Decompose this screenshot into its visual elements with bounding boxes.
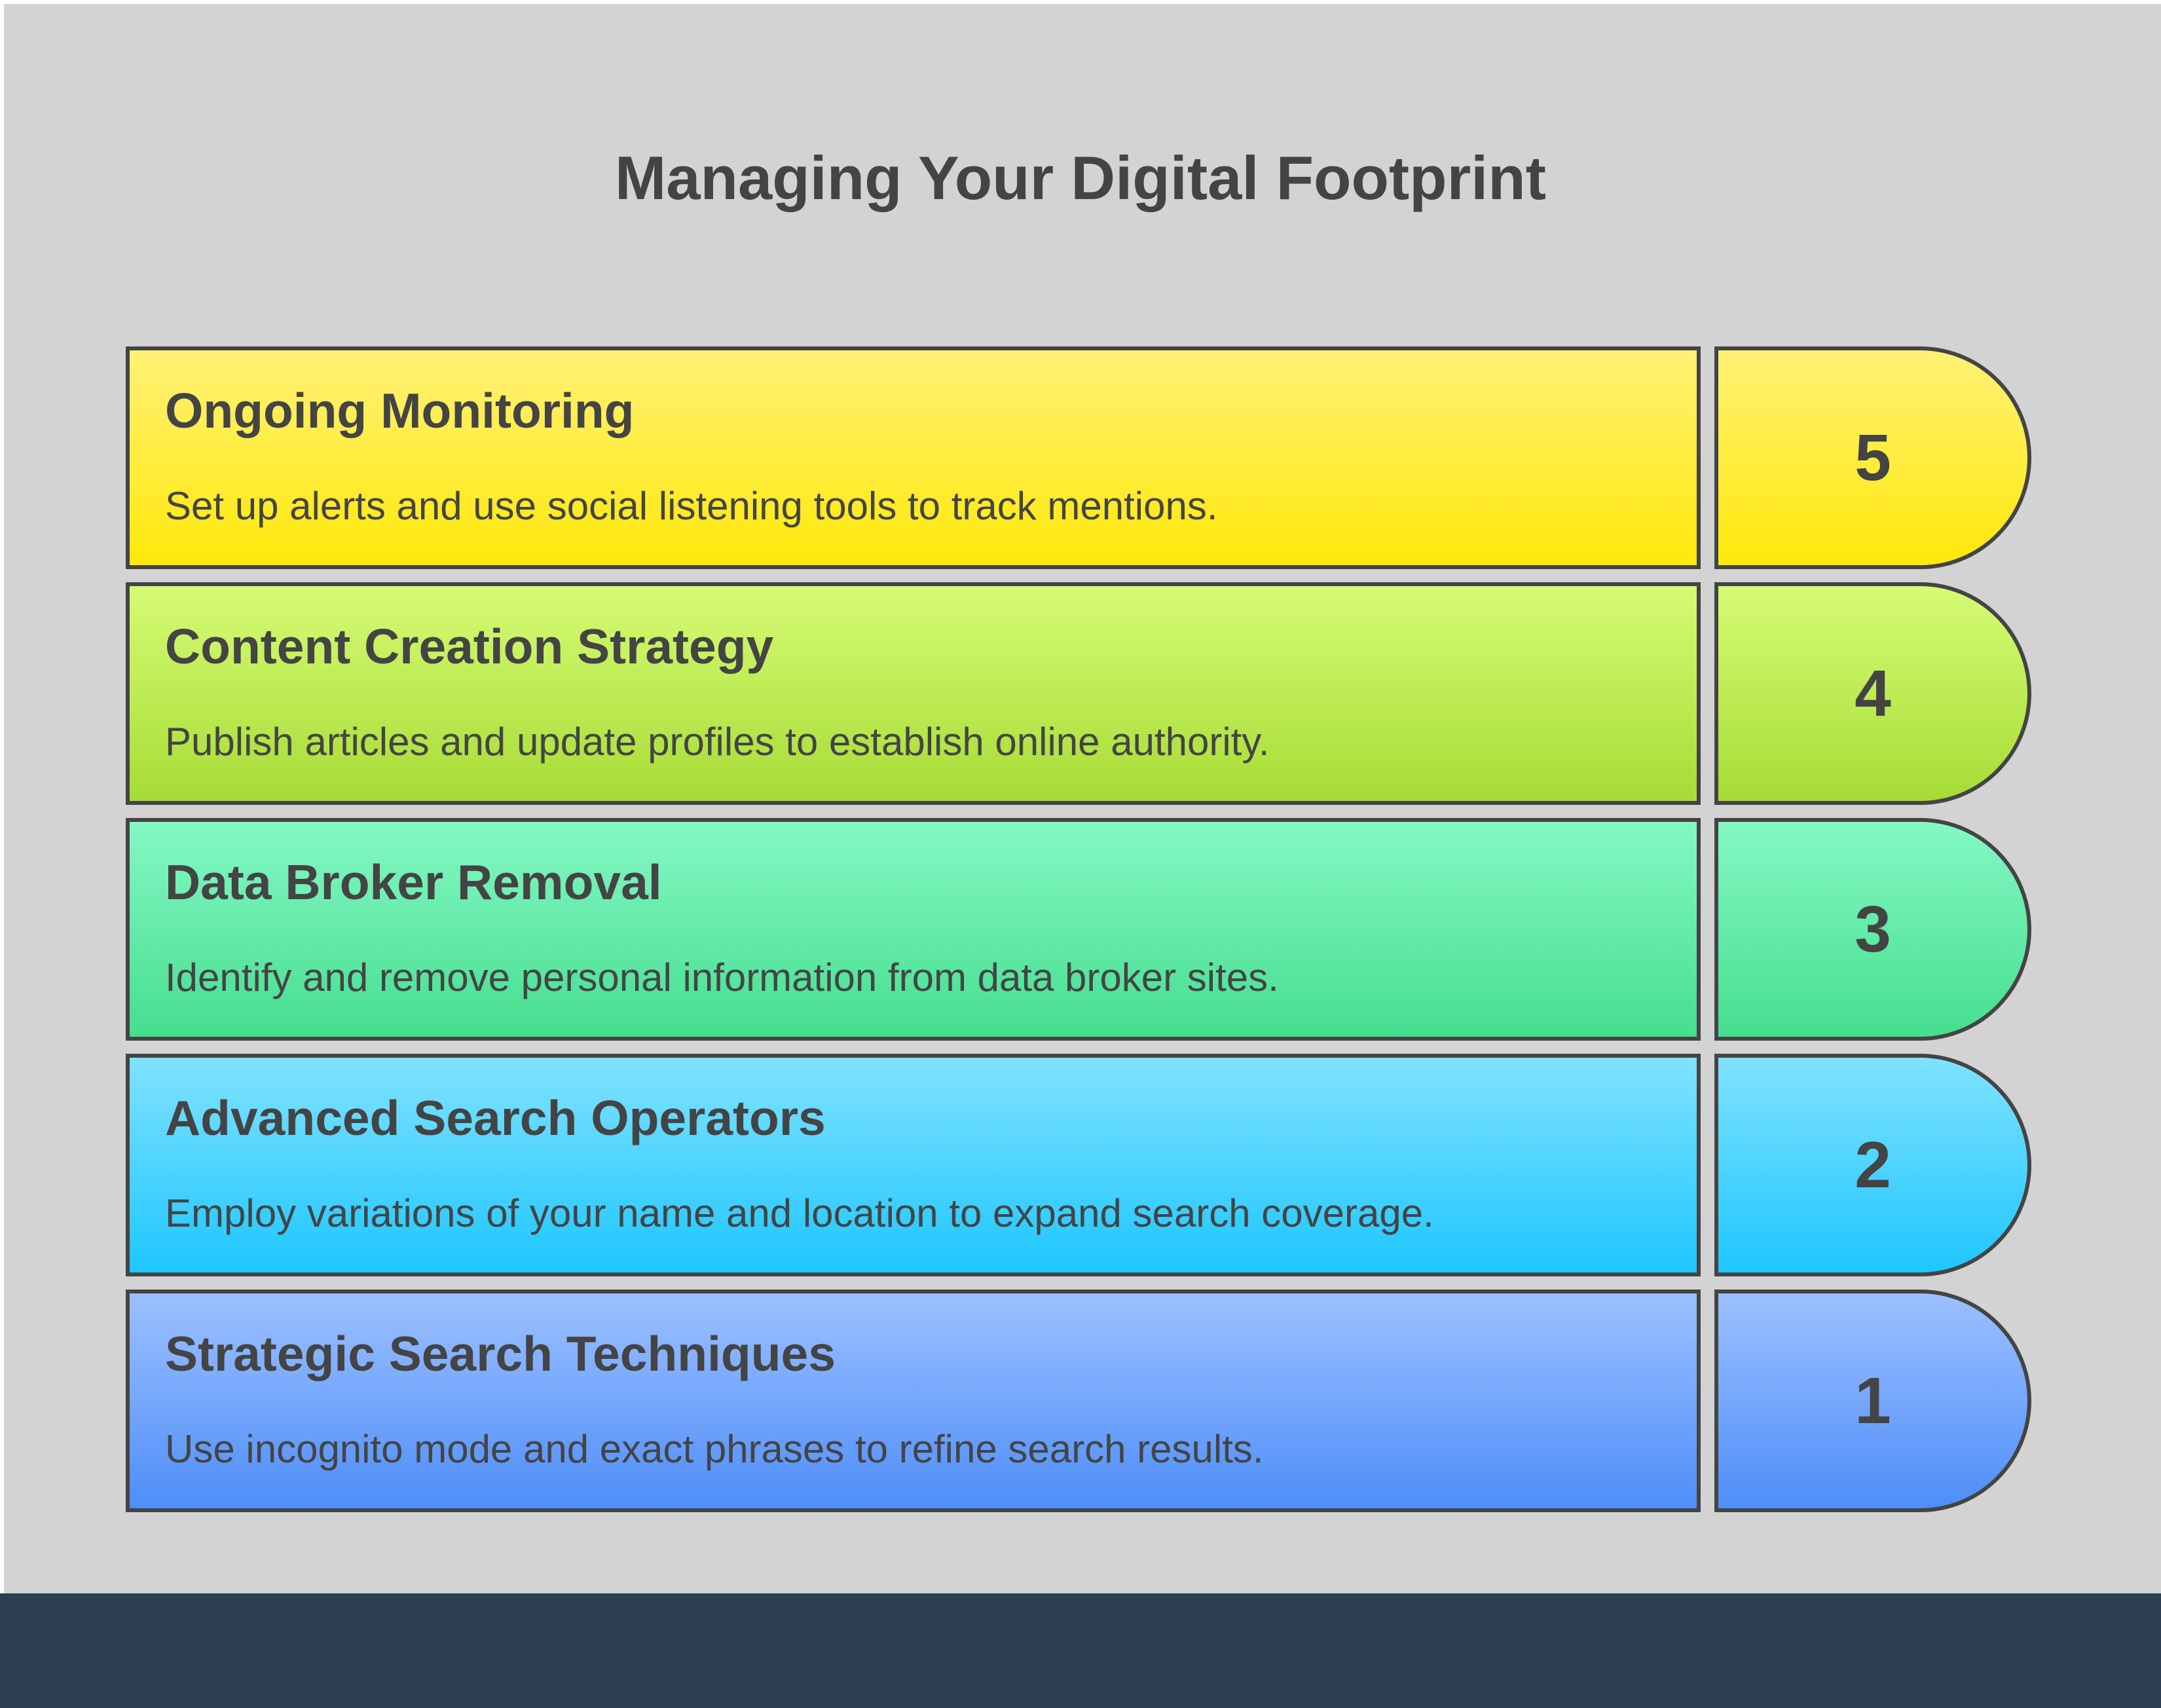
box: content creation strategy [126,582,1701,805]
box: content creation strategy: Content Creation Strategy [165,619,773,674]
number 1 [1714,1290,2031,1512]
row 4: content creation [126,582,2031,805]
box: content creation strategy: Publish articles and update profiles to establish online authority. [165,720,1270,764]
number 3: 3 [1855,892,1891,965]
number 4: 4 [1855,656,1891,730]
box: data broker removal: Identify and remove personal information from data broker sites. [165,956,1279,999]
number 3 [1714,818,2031,1041]
number 2: 2 [1855,1128,1891,1201]
box: advanced search operators: Employ variations of your name and location to expand search coverage. [165,1191,1434,1235]
box: data broker removal [126,818,1701,1041]
title: Managing Your Digital Footprint [615,143,1546,212]
row 1: strategic search techniques [126,1290,2031,1512]
box: ongoing monitoring [126,346,1701,569]
box: strategic search techniques: Strategic Search Techniques [165,1326,836,1381]
number 5 [1714,346,2031,569]
number 1: 1 [1855,1364,1891,1437]
box: advanced search operators: Advanced Search Operators [165,1090,826,1145]
box: advanced search operators [126,1054,1701,1276]
number 4 [1714,582,2031,805]
number 2 [1714,1054,2031,1276]
row 3: data broker removal [126,818,2031,1041]
footer bar [0,1593,2161,1708]
row 5: ongoing monitoring [126,346,2031,569]
box: data broker removal: Data Broker Removal [165,855,662,910]
box: strategic search techniques [126,1290,1701,1512]
number 5: 5 [1855,420,1891,494]
box: ongoing monitoring: Ongoing Monitoring [165,383,634,438]
box: strategic search techniques: Use incognito mode and exact phrases to refine search results. [165,1427,1264,1471]
row 2: advanced search operators [126,1054,2031,1276]
box: ongoing monitoring: Set up alerts and use social listening tools to track mentions. [165,484,1218,528]
